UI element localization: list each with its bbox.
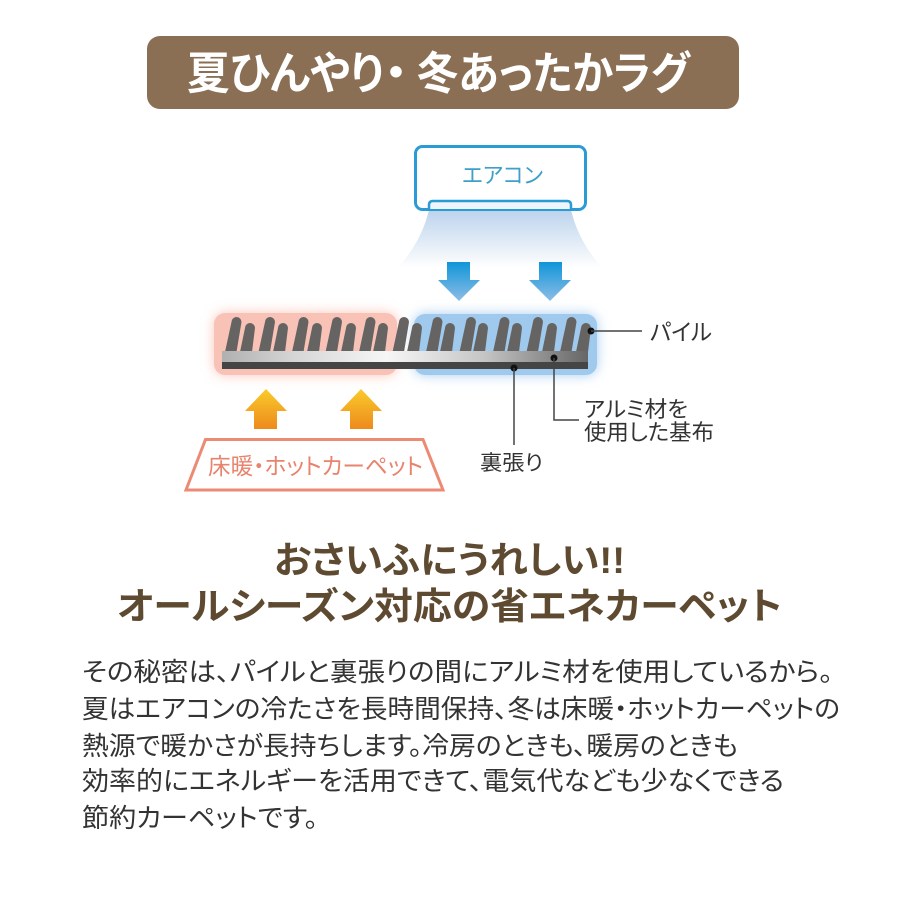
title banner: [147, 36, 739, 109]
callout: aluminium base: 使用した基布: [584, 420, 714, 445]
arrow: warm air left: [245, 389, 287, 429]
icon: air conditioner: エアコン: [462, 163, 543, 188]
body text: その秘密は、パイルと裏張りの間にアルミ材を使用しているから。: [82, 657, 833, 687]
heading: おさいふにうれしい!!: [274, 540, 625, 581]
body text: [82, 657, 840, 833]
title banner: ・: [385, 48, 407, 99]
floor heating box: 床暖・ホットカーペット: [208, 453, 423, 479]
cool air beam: [397, 210, 603, 268]
body text: 熱源で暖かさが長持ちします。冷房のときも、暖房のときも: [82, 731, 738, 761]
arrow: warm air right: [340, 389, 382, 429]
callout: pile: [588, 319, 712, 345]
rug pile: [225, 317, 591, 352]
heading: オールシーズン対応の省エネカーペット: [117, 586, 782, 627]
callout: aluminium base: アルミ材を: [584, 397, 688, 422]
title banner: 冬あったかラグ: [417, 48, 691, 99]
backing layer: [222, 362, 588, 369]
title banner: 夏ひんやり: [187, 48, 384, 99]
callout: aluminium base: [550, 354, 714, 445]
aluminium base fabric: [222, 351, 588, 362]
cool zone glow: [414, 314, 597, 375]
callout: backing: [480, 364, 543, 475]
body text: 夏はエアコンの冷たさを長時間保持、冬は床暖・ホットカーペットの: [82, 694, 840, 724]
body text: 節約カーペットです。: [82, 803, 318, 833]
callout: pile: パイル: [650, 319, 712, 345]
arrow: cool air right: [529, 262, 571, 301]
diagram: rug insulation: [186, 146, 714, 490]
callout: backing: 裏張り: [480, 452, 543, 475]
body text: 効率的にエネルギーを活用できて、電気代なども少なくできる: [82, 766, 784, 796]
heading: [117, 540, 782, 627]
warm zone glow: [214, 313, 397, 375]
icon: air conditioner: [416, 146, 586, 210]
floor heating box: [186, 440, 443, 490]
arrow: cool air left: [438, 262, 480, 301]
